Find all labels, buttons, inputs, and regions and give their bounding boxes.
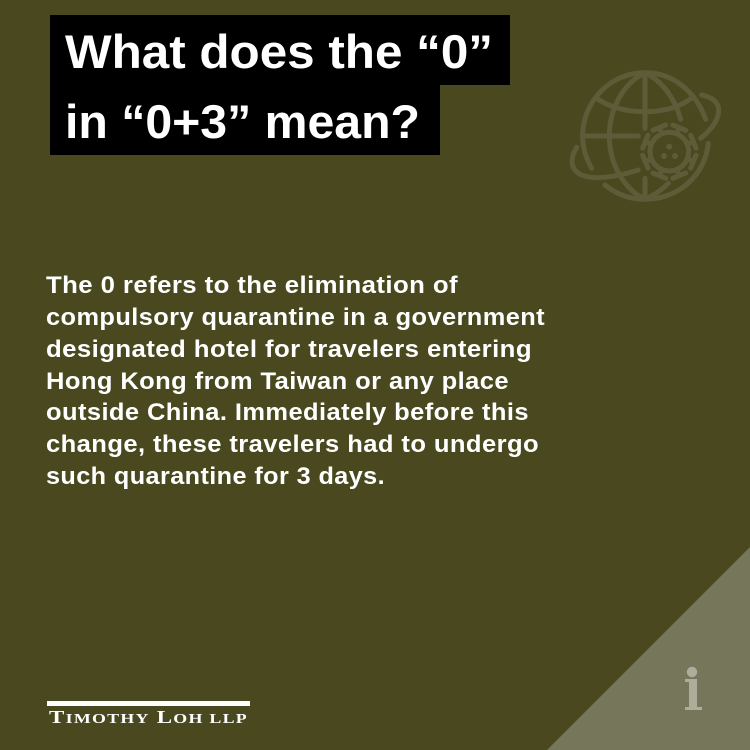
body text <box>46 272 545 490</box>
icon: info i <box>685 667 702 710</box>
logo: Timothy Loh LLP <box>47 701 250 727</box>
title line 1: What does the “0” <box>65 25 493 78</box>
icon: globe with virus <box>572 73 719 199</box>
body text: designated hotel for travelers entering <box>46 336 532 363</box>
virus <box>643 125 696 178</box>
title line 2: in “0+3” mean? <box>65 95 420 148</box>
body text: compulsory quarantine in a government <box>46 304 545 331</box>
body text: Hong Kong from Taiwan or any place <box>46 368 509 395</box>
corner triangle <box>547 547 750 750</box>
body text: outside China. Immediately before this <box>46 399 529 426</box>
body text: change, these travelers had to undergo <box>46 431 539 458</box>
body text: The 0 refers to the elimination of <box>46 272 458 299</box>
title highlight background <box>50 15 510 155</box>
title block <box>50 15 510 155</box>
logo: Timothy Loh LLP: T IMOTHY L OH LLP <box>49 707 248 727</box>
body text: such quarantine for 3 days. <box>46 463 385 490</box>
